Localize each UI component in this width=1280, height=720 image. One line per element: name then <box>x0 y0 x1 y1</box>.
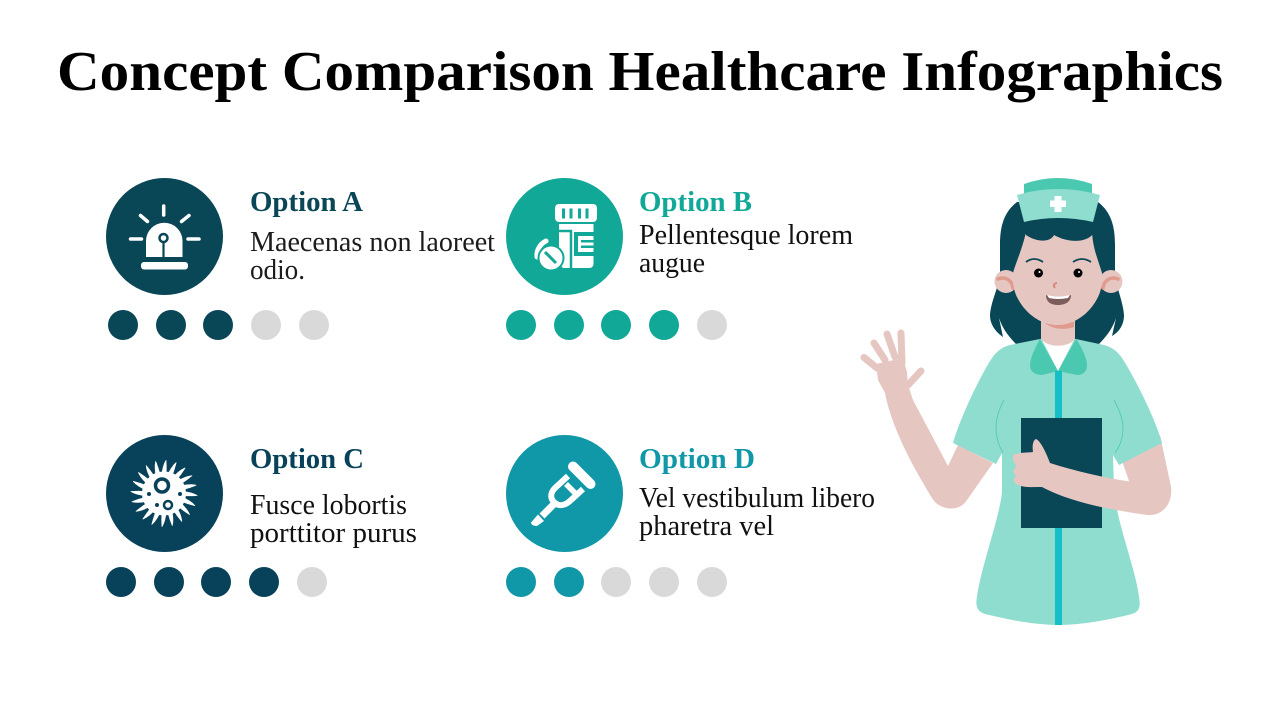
nurse left arm raised <box>864 333 993 509</box>
text: option C description: porttitor purus <box>250 518 417 549</box>
heading: option B: Option B <box>639 186 752 218</box>
icon: crutch <box>506 435 623 552</box>
rating dots: option A <box>108 310 329 340</box>
icon: medicine bottle and pills <box>506 178 623 295</box>
text: option D description: Vel vestibulum libero <box>639 483 875 514</box>
heading: option D: Option D <box>639 443 755 475</box>
icon: alarm siren <box>106 178 223 295</box>
panel: option B <box>506 178 853 340</box>
illustration: nurse <box>864 178 1171 625</box>
nurse face <box>1013 232 1102 325</box>
nurse right forearm and hand <box>1013 439 1171 515</box>
rating dots: option C <box>106 567 327 597</box>
clipboard <box>1021 418 1102 528</box>
rating dots: option B <box>506 310 727 340</box>
nurse uniform <box>953 339 1162 625</box>
uniform neckline <box>1041 338 1075 371</box>
uniform seams <box>996 400 1123 453</box>
nurse ears <box>994 270 1122 293</box>
neck shadow <box>1044 322 1074 329</box>
panel: option D <box>506 435 875 597</box>
text: option B description: Pellentesque lorem <box>639 220 853 251</box>
heading: option C: Option C <box>250 443 364 475</box>
text: option C description: Fusce lobortis <box>250 490 407 521</box>
nurse upper right arm <box>1120 435 1171 487</box>
text: option A description: odio. <box>250 255 305 286</box>
heading: option A: Option A <box>250 186 363 218</box>
text: option D description: pharetra vel <box>639 511 774 542</box>
nurse facial features <box>1026 259 1091 305</box>
text: option B description: augue <box>639 248 705 279</box>
nurse hair <box>990 202 1124 345</box>
panel: option C <box>106 435 417 597</box>
nurse cap <box>1017 178 1100 222</box>
icon: virus cell <box>106 435 223 552</box>
nurse neck <box>1041 318 1075 346</box>
nurse fringe <box>1020 216 1097 241</box>
rating dots: option D <box>506 567 727 597</box>
title: Concept Comparison Healthcare Infographics <box>57 41 1223 103</box>
text: option A description: Maecenas non laoreet <box>250 227 495 258</box>
uniform collar <box>1030 339 1087 375</box>
panel: option A <box>106 178 495 340</box>
uniform zipper <box>1055 371 1062 625</box>
